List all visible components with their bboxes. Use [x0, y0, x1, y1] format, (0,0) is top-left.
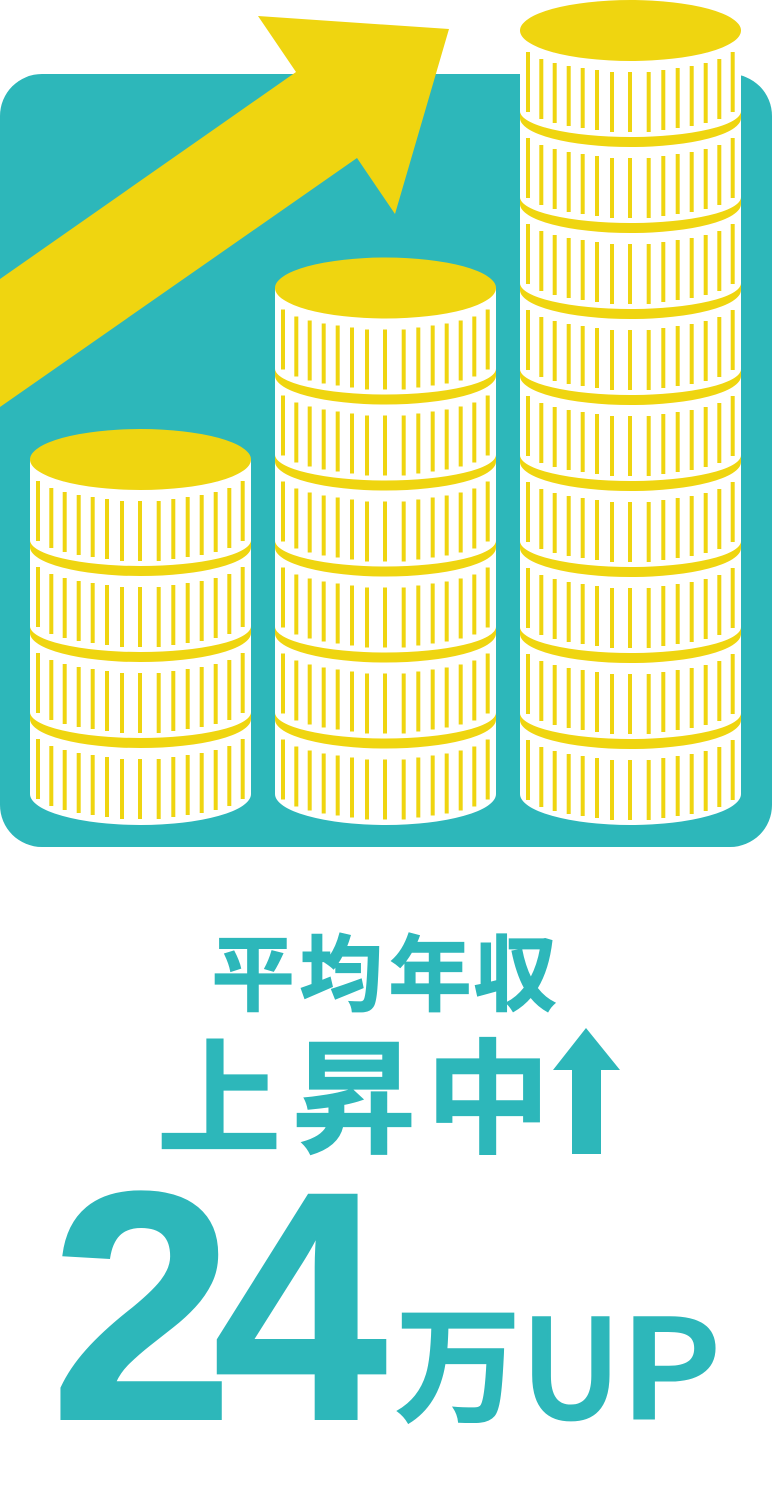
- panel: teal background: [0, 74, 772, 847]
- figure: 24: 2: [50, 1125, 234, 1489]
- heading: rising: 上昇中: [157, 999, 550, 1179]
- label: UP: P: [620, 1261, 721, 1458]
- figure: 24: [50, 1125, 389, 1489]
- coin stack: tall: [520, 0, 741, 825]
- arrow: rising yellow arrow: [0, 16, 449, 407]
- heading: average annual income: 平均年収: [212, 908, 556, 1028]
- unit: man: 万: [395, 1267, 521, 1449]
- label: UP: [521, 1261, 721, 1458]
- figure: 24: 4: [213, 1125, 389, 1489]
- coin stack: medium: [275, 258, 496, 825]
- label: UP: U: [521, 1261, 621, 1458]
- icon: up arrow: [553, 1028, 620, 1154]
- coin stack: short: [30, 429, 251, 825]
